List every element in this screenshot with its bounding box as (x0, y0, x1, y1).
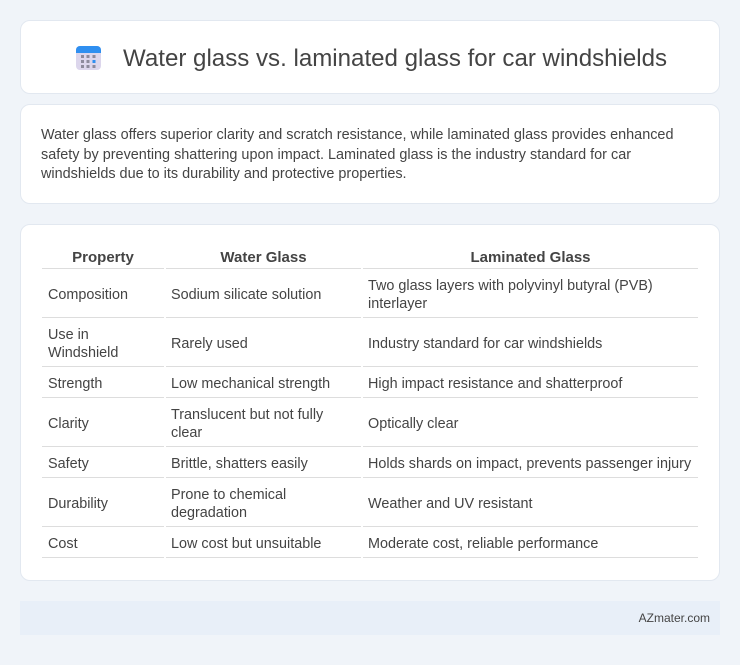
row: Composition: Two glass layers with polyvinyl butyral (PVB) (368, 278, 653, 294)
summary text: safety by preventing shattering upon impact. Laminated glass is the industry standard for car (41, 146, 631, 162)
row: Durability: degradation (171, 505, 247, 521)
footer credit: AZmater.com (639, 611, 710, 625)
row: Strength: High impact resistance and shatterproof (368, 376, 622, 392)
column heading: Water Glass: Water Glass (220, 249, 307, 266)
row: Cost: Moderate cost, reliable performance (368, 536, 598, 552)
summary text (41, 127, 673, 182)
row: Cost: Low cost but unsuitable (171, 536, 321, 552)
footer bar (20, 601, 720, 635)
row: Clarity: clear (171, 425, 202, 441)
row: Clarity: Clarity (48, 416, 89, 432)
column heading: Property: Property (72, 249, 134, 266)
row: Clarity: Translucent but not fully (171, 407, 323, 423)
row: Durability (48, 487, 533, 521)
row: Durability: Prone to chemical (171, 487, 286, 503)
panel: title card (20, 20, 720, 94)
row: Safety (48, 456, 692, 472)
row: Composition: Sodium silicate solution (171, 287, 321, 303)
row: Durability: Durability (48, 496, 108, 512)
row: Cost (48, 536, 598, 552)
panel: summary card (20, 104, 720, 204)
row: Strength: Low mechanical strength (171, 376, 330, 392)
row: Cost: Cost (48, 536, 78, 552)
panel: comparison table card (20, 224, 720, 581)
column heading: Laminated Glass: Laminated Glass (470, 249, 591, 266)
row: Composition: interlayer (368, 296, 427, 312)
row: Safety: Safety (48, 456, 89, 472)
summary text: Water glass offers superior clarity and scratch resistance, while laminated glass provides enhanced (41, 127, 673, 143)
row: Use in Windshield: Rarely used (171, 336, 248, 352)
row: Composition: Composition (48, 287, 128, 303)
row: Strength (48, 376, 622, 392)
row: Use in Windshield: Industry standard for car windshields (368, 336, 602, 352)
row: Use in Windshield (48, 327, 602, 361)
row: Use in Windshield: Use in (48, 327, 89, 343)
title: Water glass vs. laminated glass for car windshields (123, 45, 667, 72)
row: Composition (48, 278, 653, 312)
row: Safety: Brittle, shatters easily (171, 456, 308, 472)
icon: calendar (76, 46, 101, 70)
row: Safety: Holds shards on impact, prevents passenger injury (368, 456, 691, 472)
row: Use in Windshield: Windshield (48, 345, 118, 361)
row: Clarity (48, 407, 458, 441)
row: Clarity: Optically clear (368, 416, 458, 432)
summary text: windshields due to its durability and protective properties. (41, 166, 407, 182)
row: Strength: Strength (48, 376, 102, 392)
row: Durability: Weather and UV resistant (368, 496, 533, 512)
